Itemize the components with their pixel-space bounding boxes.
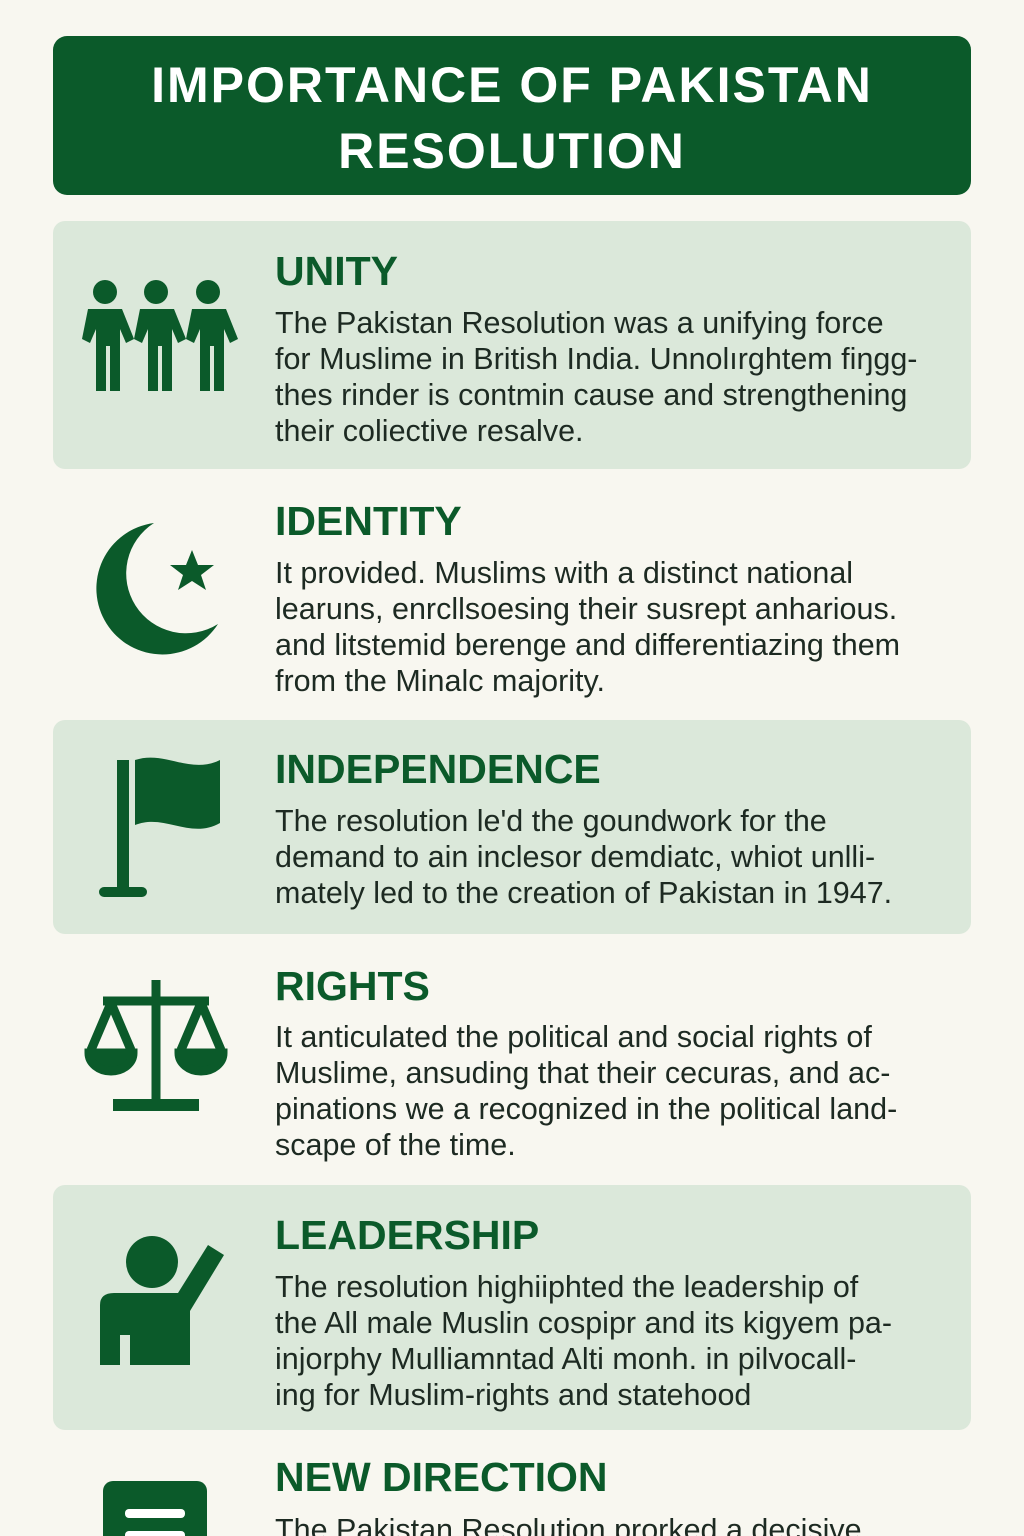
heading: new direction: NEW DIRECTION — [275, 1454, 608, 1500]
icon: flag — [99, 758, 220, 897]
title: RESOLUTION — [338, 123, 686, 179]
text: rights: pinations we a recognized in the political land- — [275, 1092, 897, 1126]
title: IMPORTANCE OF PAKISTAN — [151, 57, 873, 113]
text: leadership: The resolution highiiphted the leadership of — [275, 1270, 858, 1304]
panel: unity — [53, 221, 971, 469]
text: leadership: ing for Muslim-rights and statehood — [275, 1378, 751, 1412]
heading: independence: INDEPENDENCE — [275, 746, 601, 792]
text: leadership: injorphy Mulliamntad Alti monh. in pilvocall- — [275, 1342, 856, 1376]
heading: rights: RIGHTS — [275, 963, 430, 1009]
text: rights: scape of the time. — [275, 1128, 516, 1162]
text: unity — [275, 306, 917, 448]
text: independence: demand to ain inclesor demdiatc, whiot unlli- — [275, 840, 875, 874]
text: rights: It anticulated the political and social rights of — [275, 1020, 872, 1054]
text: identity: It provided. Muslims with a distinct national — [275, 556, 853, 590]
text: identity: and litstemid berenge and differentiazing them — [275, 628, 900, 662]
text: leadership: the All male Muslin cospipr and its kigyem pa- — [275, 1306, 892, 1340]
icon: person raising arm — [100, 1236, 224, 1365]
title — [53, 36, 971, 195]
icon: people — [82, 280, 238, 391]
icon: document — [103, 1481, 207, 1536]
text: identity: learuns, enrcllsoesing their susrept anharious. — [275, 592, 897, 626]
panel: leadership — [53, 1185, 971, 1430]
panel: independence — [53, 720, 971, 934]
heading: identity: IDENTITY — [275, 498, 462, 544]
text: identity: from the Minalc majority. — [275, 664, 605, 698]
text: unity: The Pakistan Resolution was a unifying force — [275, 306, 884, 340]
heading: leadership: LEADERSHIP — [275, 1212, 539, 1258]
icon: scales — [84, 980, 228, 1111]
text: leadership — [275, 1270, 892, 1412]
text: rights: Muslime, ansuding that their cecuras, and ac- — [275, 1056, 890, 1090]
text: rights — [275, 1020, 897, 1162]
text: unity: for Muslime in British India. Unnolırghtem fiŋgg- — [275, 342, 917, 376]
text: independence — [275, 804, 892, 910]
text: independence: mately led to the creation of Pakistan in 1947. — [275, 876, 892, 910]
icon: crescent and star — [96, 523, 218, 654]
text: identity — [275, 556, 900, 698]
text: independence: The resolution le'd the goundwork for the — [275, 804, 827, 838]
text: unity: thes rinder is contmin cause and strengthening — [275, 378, 907, 412]
text: unity: their coliective resalve. — [275, 414, 584, 448]
heading: unity: UNITY — [275, 248, 398, 294]
